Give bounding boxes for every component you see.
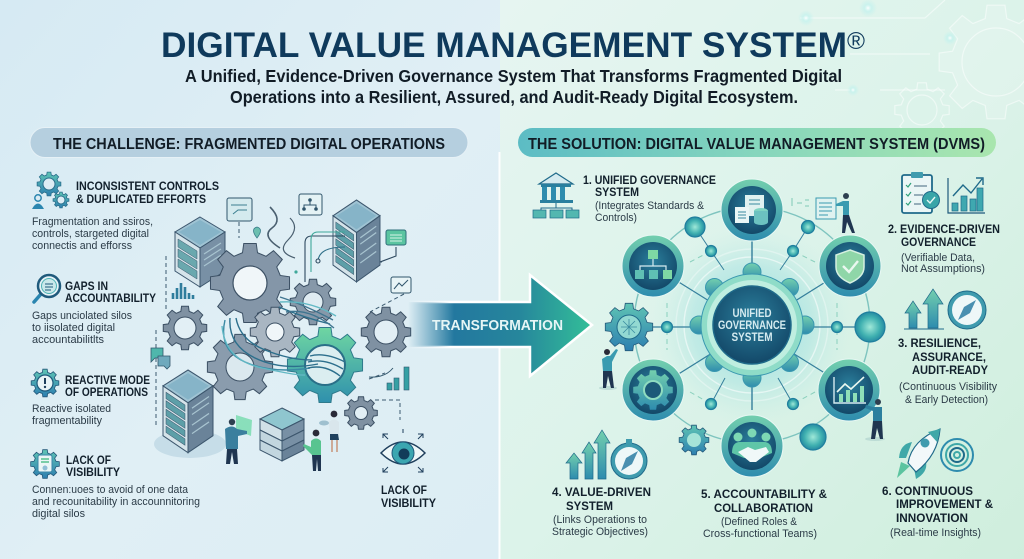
node: center gear <box>690 263 814 387</box>
person: woman with tablet <box>319 411 339 452</box>
gear: rear lower <box>207 334 273 400</box>
heading: the challenge <box>30 128 468 158</box>
node: hierarchy <box>622 235 684 297</box>
item: reactive mode: Reactive isolated <box>32 403 111 415</box>
item: gaps in accountability <box>32 275 156 346</box>
item: reactive mode <box>31 369 150 427</box>
tangled cables <box>222 297 345 376</box>
icon: compass <box>611 439 647 479</box>
panel: solution 1: 1. UNIFIED GOVERNANCE <box>583 175 716 187</box>
person: woman in green <box>303 430 321 471</box>
item: gaps in accountability: accountabilitlts <box>32 334 105 346</box>
server: top right <box>333 200 380 282</box>
panel: solution 4 <box>552 430 651 538</box>
panel: solution 5 <box>701 489 827 540</box>
illustration: fragmented operations <box>151 194 436 510</box>
gear: small lower <box>345 397 377 429</box>
item: reactive mode: REACTIVE MODE <box>65 375 150 387</box>
panel: solution 1 <box>533 173 716 224</box>
item: inconsistent controls: connectis and efforss <box>32 240 133 252</box>
gear: rear center <box>290 279 336 325</box>
icon: compass <box>948 291 986 329</box>
card: hierarchy <box>299 194 322 215</box>
panel: solution 6: INNOVATION <box>896 513 968 525</box>
panel: challenge list <box>31 172 219 520</box>
icon: rising arrows <box>904 289 944 329</box>
item: reactive mode: OF OPERATIONS <box>65 387 148 399</box>
gear: green <box>287 327 363 403</box>
item: lack of visibility: LACK OF <box>66 455 111 467</box>
server: top left <box>175 217 225 287</box>
card: trend line <box>391 277 411 293</box>
panel: solution 4: (Links Operations to <box>553 514 647 526</box>
node: collaboration <box>721 415 783 477</box>
panel: solution 3: 3. RESILIENCE, <box>898 338 981 350</box>
icon: magnifier <box>34 275 60 302</box>
item: inconsistent controls: controls, stargeted digital <box>32 228 149 240</box>
panel: solution 4: Strategic Objectives) <box>552 526 648 538</box>
icon: bars right <box>369 367 409 390</box>
person: left of hub <box>599 349 618 390</box>
person: man with screen <box>225 415 252 464</box>
label: lack of visibility: VISIBILITY <box>381 498 436 510</box>
server: bottom left <box>154 370 226 458</box>
card: green text <box>386 230 406 245</box>
heading: the solution <box>518 128 996 157</box>
panel: solution 6: 6. CONTINUOUS <box>882 486 973 498</box>
icon: growth chart <box>948 178 985 213</box>
label: lack of visibility: LACK OF <box>381 485 427 497</box>
small nodes <box>662 217 885 450</box>
item: reactive mode: fragmentability <box>32 415 103 427</box>
icon: rocket <box>897 429 940 479</box>
title: ® <box>847 28 865 55</box>
item: lack of visibility: Connen:uoes to avoid of one data <box>32 484 188 496</box>
panel: solution 1: Controls) <box>595 212 637 224</box>
panel: solution 6 <box>882 429 993 539</box>
icon: bars left <box>173 283 193 299</box>
subtitle: A Unified, Evidence-Driven Governance System That Transforms Fragmented Digital <box>185 66 842 86</box>
icon: gears and person <box>32 172 69 209</box>
dashed connectors <box>156 222 404 426</box>
node: gear <box>622 359 684 421</box>
node: center gear: GOVERNANCE <box>718 318 786 332</box>
icon: document gear <box>31 450 59 478</box>
node: growth chart <box>818 359 880 421</box>
subtitle <box>185 66 842 107</box>
node: brain gear <box>605 303 653 351</box>
subtitle: Operations into a Resilient, Assured, and Audit-Ready Digital Ecosystem. <box>230 87 798 107</box>
connector wires: top <box>268 207 396 282</box>
icon: location drop <box>254 227 260 238</box>
icon: institution <box>533 173 579 218</box>
node: center gear: SYSTEM <box>732 330 773 344</box>
panel: solution 3: & Early Detection) <box>905 394 988 406</box>
gear: large gray <box>210 243 290 323</box>
icon: clipboard <box>902 172 940 213</box>
item: lack of visibility: and recounitability in accounnitoring <box>32 496 200 508</box>
item: gaps in accountability: GAPS IN <box>65 281 108 293</box>
item: lack of visibility: VISIBILITY <box>66 467 120 479</box>
node: shield <box>819 235 881 297</box>
icon: rising arrows <box>566 430 610 479</box>
node: center gear: UNIFIED <box>732 306 772 320</box>
item: inconsistent controls: INCONSISTENT CONTROLS <box>76 181 219 193</box>
heading: the challenge: THE CHALLENGE: FRAGMENTED DIGITAL OPERATIONS <box>53 136 445 153</box>
item: inconsistent controls: Fragmentation and ssiros, <box>32 216 153 228</box>
outer ring and spokes <box>629 207 870 443</box>
icon: spiral <box>941 439 973 471</box>
panel: solution 2 <box>888 172 1000 275</box>
small gear: lower left <box>679 425 709 455</box>
panel: solution 5: COLLABORATION <box>714 503 813 515</box>
card: flow chart <box>227 198 252 221</box>
panel: solution 1: SYSTEM <box>595 187 639 199</box>
panel: solution 3: (Continuous Visibility <box>899 381 998 393</box>
arrow: transformation <box>408 275 592 376</box>
node: documents and database <box>721 179 783 241</box>
gear: center <box>250 307 300 357</box>
item: lack of visibility <box>31 450 200 520</box>
panel: solution 2: GOVERNANCE <box>901 237 976 249</box>
item: inconsistent controls <box>32 172 219 252</box>
item: gaps in accountability: to iisolated digital <box>32 322 115 334</box>
icon: alert gear <box>31 369 59 397</box>
panel: solution 5: Cross-functional Teams) <box>703 528 817 540</box>
panel: solution 4: SYSTEM <box>566 501 613 513</box>
item: gaps in accountability: Gaps unciolated silos <box>32 310 133 322</box>
diagram: governance hub <box>599 179 885 477</box>
panel: solution 2: (Verifiable Data, <box>901 252 975 264</box>
gear: small left <box>163 306 207 350</box>
panel: solution 3 <box>898 289 998 406</box>
title: DIGITAL VALUE MANAGEMENT SYSTEM <box>161 26 847 65</box>
panel: solution 4: 4. VALUE-DRIVEN <box>552 487 651 499</box>
panel: solution 5: (Defined Roles & <box>721 516 798 528</box>
icon: chat bubbles <box>151 348 170 369</box>
panel: solution 2: 2. EVIDENCE-DRIVEN <box>888 224 1000 236</box>
icon: eye <box>381 429 425 472</box>
gear: right <box>361 307 411 357</box>
heading: the solution: THE SOLUTION: DIGITAL VALUE MANAGEMENT SYSTEM (DVMS) <box>528 136 985 153</box>
person: right of hub <box>865 399 885 441</box>
panel: solution 6: (Real-time Insights) <box>890 527 981 539</box>
item: gaps in accountability: ACCOUNTABILITY <box>65 293 156 305</box>
panel: solution 1: (Integrates Standards & <box>595 200 705 212</box>
label: lack of visibility <box>381 485 436 510</box>
server: stacked <box>260 408 304 461</box>
arrow: transformation: TRANSFORMATION <box>432 318 563 334</box>
panel: solution 6: IMPROVEMENT & <box>896 499 993 511</box>
panel: solution 5: 5. ACCOUNTABILITY & <box>701 489 827 501</box>
panel: solution 3: AUDIT-READY <box>912 365 988 377</box>
item: lack of visibility: digital silos <box>32 508 86 520</box>
item: inconsistent controls: & DUPLICATED EFFORTS <box>76 194 206 206</box>
card: document with person <box>792 193 855 233</box>
panel: solution 3: ASSURANCE, <box>912 352 986 364</box>
panel: solution 2: Not Assumptions) <box>901 263 985 275</box>
